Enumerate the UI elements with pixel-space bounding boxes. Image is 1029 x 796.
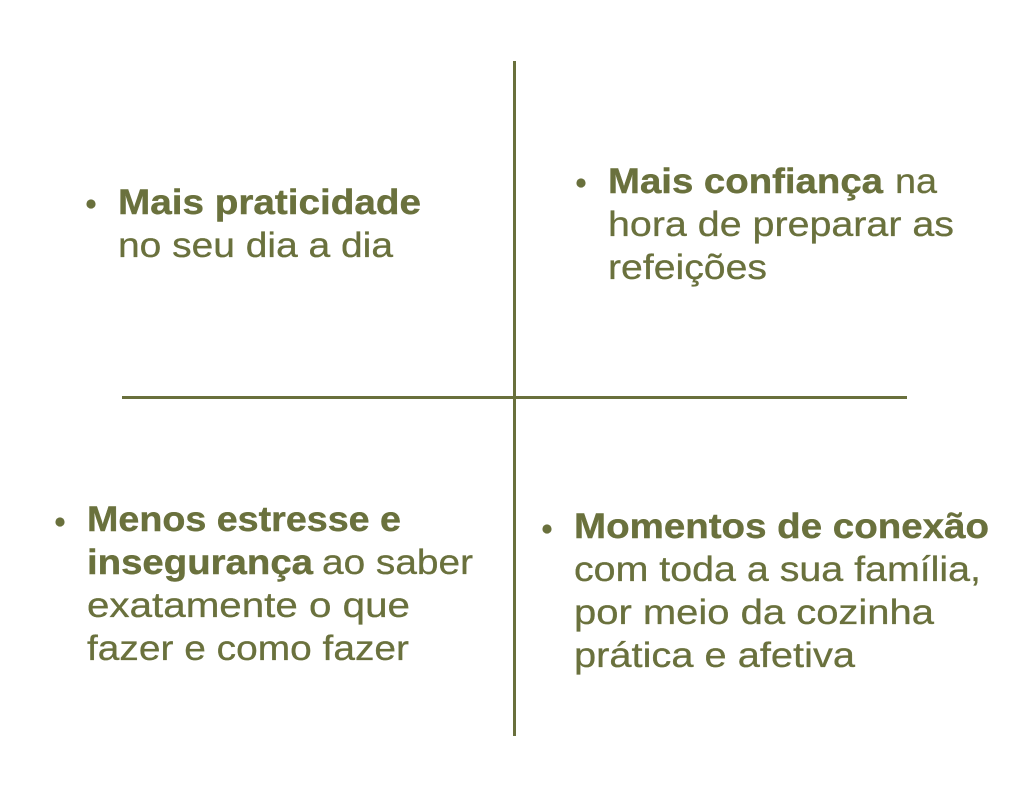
text: confianca line 1 end: na <box>895 162 938 201</box>
text: praticidade body: no seu dia a dia <box>118 226 394 265</box>
text: estresse line 3: exatamente o que <box>87 586 410 625</box>
text: inseguranca heading: insegurança <box>87 543 314 582</box>
text: conexao heading: Momentos de conexão <box>574 507 989 546</box>
text: conexao line 2: com toda a sua família, <box>574 550 981 589</box>
text: estresse line 2 end: ao saber <box>322 543 473 582</box>
bullet <box>576 178 586 188</box>
bullet <box>55 517 65 527</box>
text: confianca line 3: refeições <box>608 248 767 287</box>
horizontal divider <box>122 396 907 399</box>
text: estresse heading: Menos estresse e <box>87 500 401 539</box>
text: conexao line 4: prática e afetiva <box>574 636 856 675</box>
bullet <box>542 524 552 534</box>
text: conexao line 3: por meio da cozinha <box>574 593 935 632</box>
vertical divider <box>513 61 516 736</box>
text: praticidade heading: Mais praticidade <box>118 183 421 222</box>
panel: bottom right benefit <box>542 507 989 675</box>
bullet <box>86 199 96 209</box>
text: confianca heading: Mais confiança <box>608 162 884 201</box>
panel: bottom left benefit <box>55 500 473 668</box>
panel: top right benefit <box>576 162 954 287</box>
panel: top left benefit <box>86 183 421 265</box>
text: estresse line 4: fazer e como fazer <box>87 629 409 668</box>
text: confianca line 2: hora de preparar as <box>608 205 954 244</box>
